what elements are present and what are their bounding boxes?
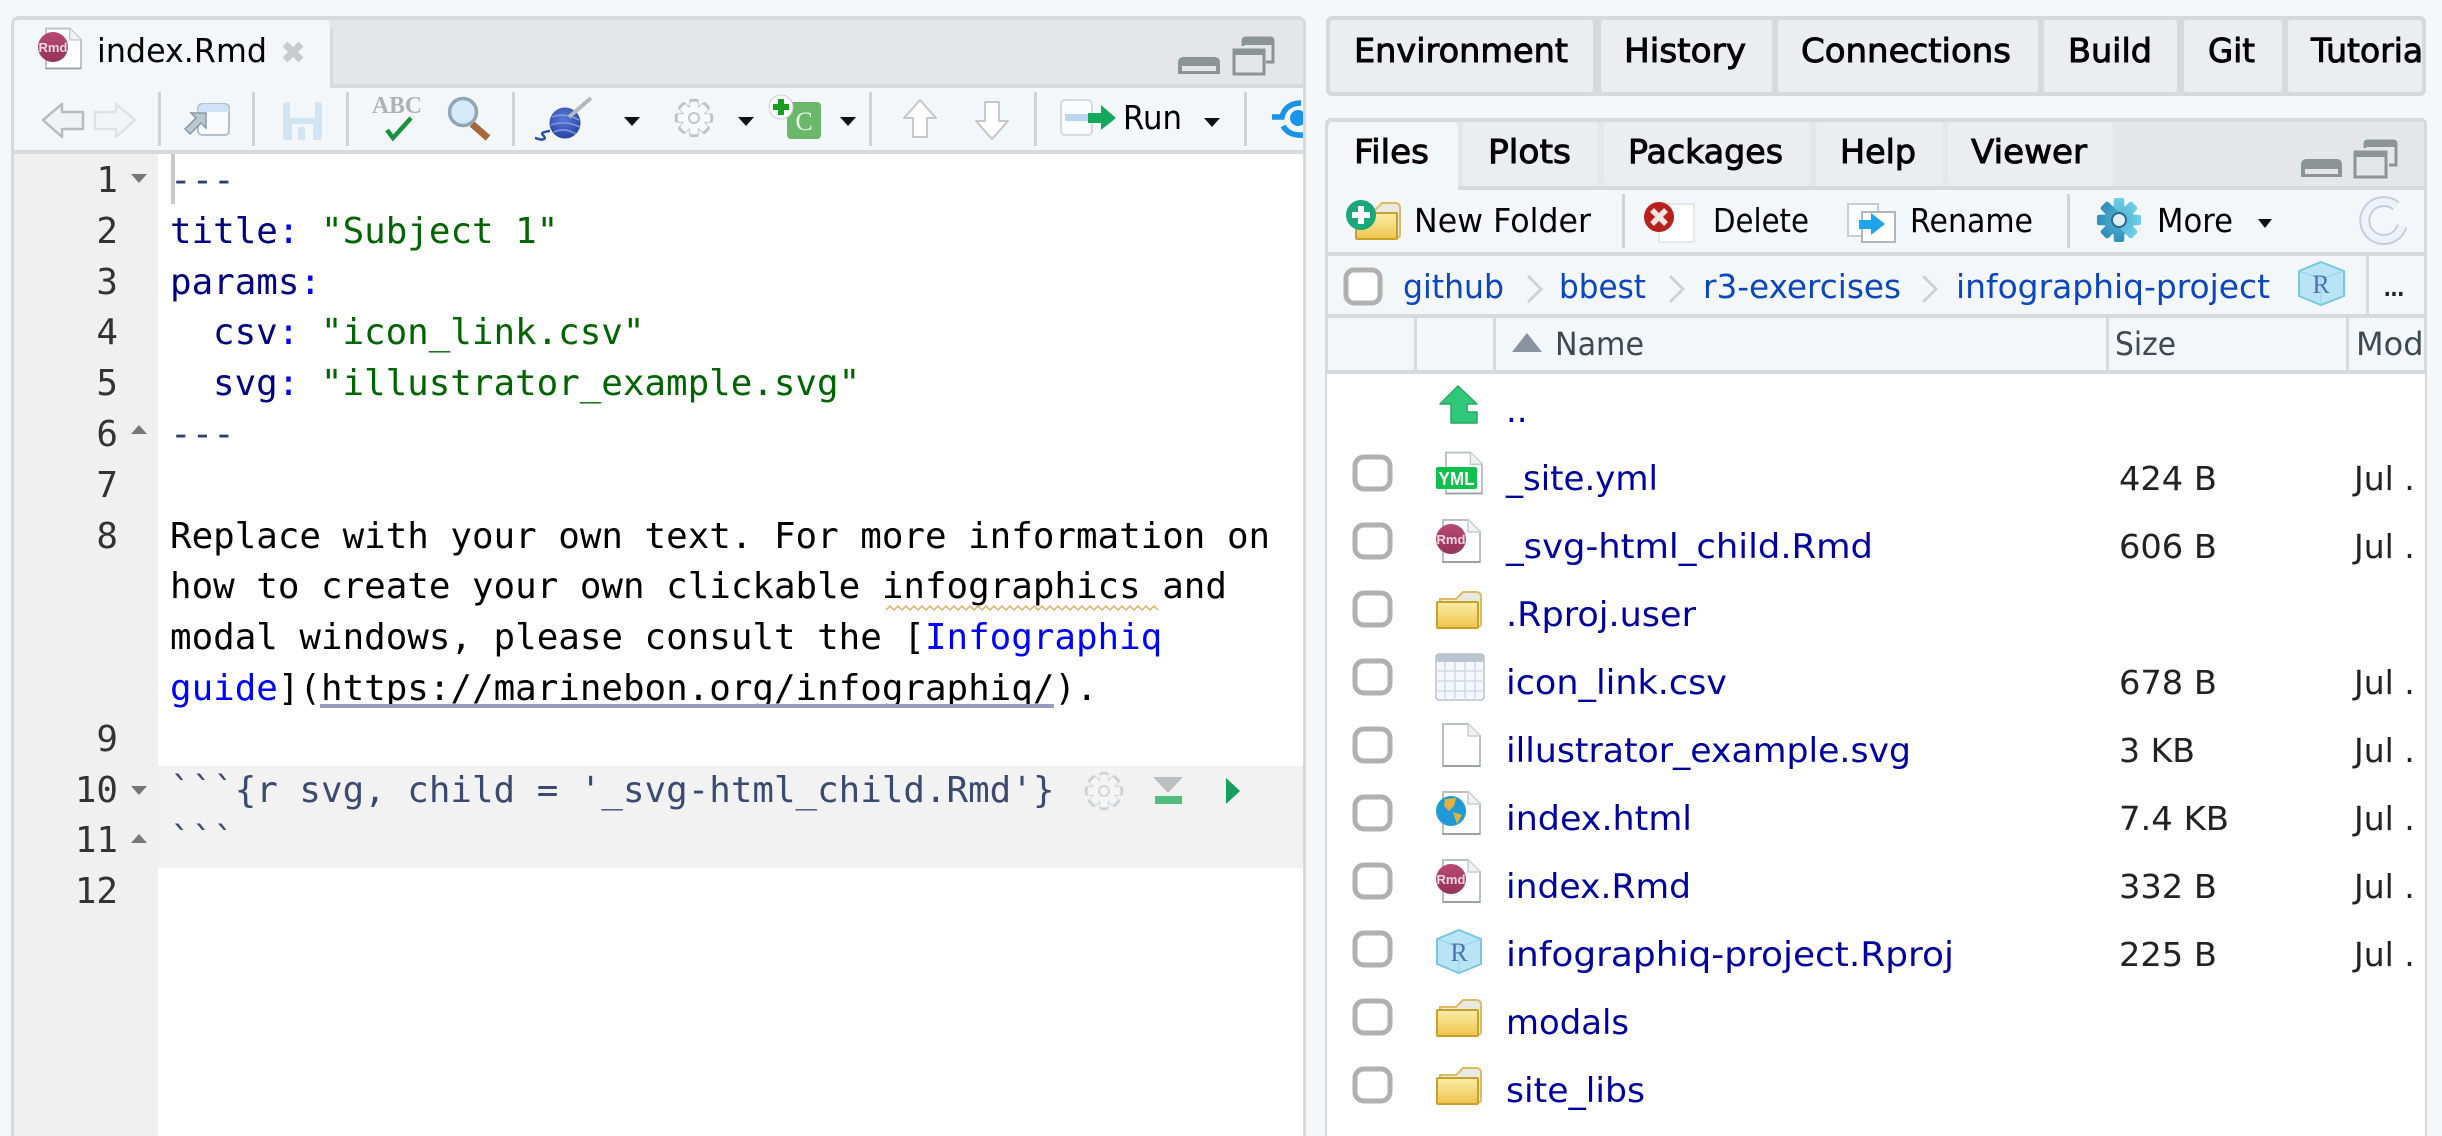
tab: Environment (1330, 20, 1593, 92)
code chunk: ```{r svg, child = '_svg-html_child.Rmd'} (170, 770, 1054, 811)
row: .Rproj.user: .Rproj.user (1506, 595, 1696, 635)
column: Name: Name (1555, 325, 1644, 363)
icon: close tab (285, 44, 301, 60)
tab: History (1601, 20, 1772, 92)
body paragraph: Replace with your own text. For more information on (170, 516, 1270, 557)
row: site_libs: site_libs (1506, 1071, 1645, 1111)
editor toolbar (43, 92, 1306, 146)
icon: Rmd file: Rmd (1437, 532, 1466, 547)
more path items: ... (2382, 265, 2406, 304)
icon: blank file (1443, 724, 1480, 766)
dropdown: knit (624, 117, 640, 126)
line number gutter: 12 (75, 871, 118, 912)
icon: Rmd file: Rmd (1437, 872, 1466, 887)
path checkbox (1346, 270, 1380, 303)
row: _site.yml: Jul . (2352, 459, 2415, 498)
icon: delete (1644, 202, 1694, 242)
line number gutter: 3 (96, 262, 118, 303)
row: index.html: Jul . (2352, 799, 2415, 838)
tab: Connections (1778, 20, 2038, 92)
tab: Files (1328, 122, 1458, 190)
parent link: .. (1506, 391, 1528, 431)
dropdown: settings (738, 117, 754, 126)
row: index.Rmd (1355, 860, 2415, 907)
body paragraph: modal windows, please consult the [Infographiq (170, 617, 1162, 658)
icon: spell check (372, 93, 422, 138)
row: _svg-html_child.Rmd: Jul . (2352, 527, 2415, 566)
link underline (320, 704, 1054, 708)
panel: source editor (11, 16, 1306, 1136)
tab: Viewer (1948, 122, 2113, 186)
icon: Rmd file (1436, 520, 1480, 562)
row: _svg-html_child.Rmd (1355, 520, 2415, 567)
row: index.Rmd: 332 B (2119, 867, 2217, 906)
text cursor (171, 154, 175, 204)
row: parent directory (1440, 386, 1528, 431)
breadcrumb: github: github (1403, 267, 1504, 306)
icon: YML file (1436, 453, 1482, 493)
button label: New Folder: New Folder (1414, 201, 1591, 240)
tab: Packages (1604, 122, 1810, 186)
tab: History: History (1624, 31, 1746, 70)
icon: show in new window (185, 104, 229, 135)
icon: Rmd document: Rmd (39, 40, 68, 55)
row: illustrator_example.svg: 3 KB (2119, 731, 2195, 770)
YAML front matter: csv: "icon_link.csv" (213, 312, 644, 353)
row: modals (1355, 1000, 1629, 1043)
icon: folder (1437, 1068, 1481, 1104)
row: icon_link.csv: Jul . (2352, 663, 2415, 702)
row: _site.yml (1355, 453, 2415, 499)
button label: More: More (2157, 201, 2233, 240)
icon: insert chunk: C (795, 107, 813, 136)
row: illustrator_example.svg: Jul . (2352, 731, 2415, 770)
line number gutter: 11 (75, 820, 118, 861)
dropdown: run (1204, 118, 1220, 127)
editor tab: index.Rmd (14, 20, 333, 88)
line number gutter: 1 (96, 160, 118, 201)
code chunk background (158, 766, 1303, 868)
icon: find (450, 98, 488, 138)
tab: Connections: Connections (1801, 31, 2011, 70)
icon: YML file: YML (1438, 469, 1474, 489)
tab: Build: Build (2068, 31, 2152, 70)
row: icon_link.csv: icon_link.csv (1506, 663, 1727, 703)
row: infographiq-project.Rproj: infographiq-project.Rproj (1506, 935, 1954, 975)
icon: folder (1437, 592, 1481, 628)
line number gutter: 8 (96, 516, 118, 557)
icon: chunk settings (1085, 772, 1123, 810)
YAML front matter: svg: "illustrator_example.svg" (213, 363, 860, 404)
panel: environment tabs (1326, 16, 2432, 96)
tab: Plots (1463, 122, 1598, 186)
breadcrumb: infographiq-project: infographiq-project (1956, 267, 2270, 306)
tab: Tutorial (clipped): Tutorial (2310, 31, 2432, 70)
tab: Tutorial (clipped) (2288, 20, 2432, 92)
tab: Plots: Plots (1488, 132, 1571, 171)
button label: Rename: Rename (1910, 201, 2033, 240)
icon: run lines (1061, 100, 1116, 135)
row: illustrator_example.svg (1355, 724, 2415, 771)
dropdown: insert chunk (840, 117, 856, 126)
icon: new folder (1346, 200, 1400, 239)
icon: R project cube: R (1450, 938, 1468, 967)
icon: maximize files pane (2355, 140, 2396, 177)
row: illustrator_example.svg: illustrator_example.svg (1506, 731, 1911, 771)
icon: run previous chunks (1153, 777, 1183, 804)
row: infographiq-project.Rproj: Jul . (2352, 935, 2415, 974)
icon: rename (1848, 204, 1895, 242)
line number gutter: 7 (96, 465, 118, 506)
line number gutter: 4 (96, 312, 118, 353)
tab: Help (1816, 122, 1943, 186)
row: index.Rmd: index.Rmd (1506, 867, 1691, 907)
tab: Environment: Environment (1354, 31, 1568, 70)
line number gutter: 6 (96, 414, 118, 455)
line number gutter: 9 (96, 719, 118, 760)
row: index.Rmd: Jul . (2352, 867, 2415, 906)
chevron (1923, 276, 1936, 302)
YAML front matter: --- (170, 160, 235, 201)
code chunk (170, 770, 1240, 861)
tab title: index.Rmd (97, 31, 267, 70)
icon: Rmd document (38, 29, 81, 68)
line number gutter: 2 (96, 211, 118, 252)
icon: back arrow (43, 104, 83, 137)
button label: Delete: Delete (1713, 201, 1809, 240)
icon: up arrow (1440, 386, 1477, 423)
icon: more gear (2097, 198, 2141, 242)
breadcrumb path bar (1328, 256, 2424, 314)
icon: minimize files pane (2301, 159, 2342, 177)
icon: previous chunk up arrow (904, 100, 936, 137)
row: modals: modals (1506, 1003, 1629, 1043)
column: Size: Size (2115, 325, 2176, 363)
row: _svg-html_child.Rmd: _svg-html_child.Rmd (1505, 527, 1873, 567)
chevron (1528, 276, 1541, 302)
YAML front matter (170, 160, 860, 455)
chevron (1670, 276, 1683, 302)
run button label: Run (1123, 98, 1182, 137)
tab: Files: Files (1354, 132, 1429, 171)
icon: run chunk (1226, 778, 1240, 804)
icon: table file (1436, 654, 1484, 700)
YAML front matter: --- (170, 414, 235, 455)
tab: Viewer: Viewer (1971, 132, 2087, 171)
files toolbar (1328, 190, 2424, 252)
row: index.html: 7.4 KB (2119, 799, 2229, 838)
breadcrumb: bbest: bbest (1559, 267, 1646, 306)
icon: next chunk down arrow (976, 102, 1008, 139)
row: icon_link.csv: 678 B (2119, 663, 2217, 702)
icon: R project cube (2299, 262, 2344, 305)
icon: Rmd file (1436, 860, 1480, 902)
icon: rerun (clipped) (1272, 103, 1306, 135)
row: infographiq-project.Rproj: 225 B (2119, 935, 2217, 974)
row: index.html: index.html (1506, 799, 1692, 839)
panel: files (1325, 118, 2442, 1136)
row: icon_link.csv (1355, 654, 2415, 703)
icon: HTML globe file (1436, 792, 1480, 834)
file list (1327, 374, 2425, 1136)
line number gutter: 5 (96, 363, 118, 404)
tab: Packages: Packages (1628, 132, 1783, 171)
line number gutter (14, 154, 158, 1136)
row: _site.yml: _site.yml (1505, 459, 1658, 499)
sort indicator (1512, 333, 1542, 352)
tab: Git: Git (2208, 31, 2255, 70)
icon: minimize pane (1178, 57, 1220, 74)
dropdown: more (2258, 219, 2272, 228)
YAML front matter: title: "Subject 1" (170, 211, 558, 252)
spell-check squiggle (886, 606, 1158, 610)
icon: folder (1437, 1000, 1481, 1036)
row: site_libs (1355, 1068, 1645, 1111)
row: index.html (1355, 792, 2415, 839)
icon: forward arrow (95, 104, 135, 137)
icon: insert chunk (769, 95, 821, 139)
body paragraph: how to create your own clickable infographics and (170, 566, 1227, 607)
icon: spell check: ABC (372, 93, 422, 119)
icon: save (283, 102, 322, 140)
icon: R project cube (1437, 930, 1481, 973)
body paragraph: guide](https://marinebon.org/infographiq/). (170, 668, 1098, 709)
icon: maximize pane (1234, 38, 1273, 74)
breadcrumb: r3-exercises: r3-exercises (1703, 267, 1901, 306)
row: infographiq-project.Rproj (1355, 930, 2415, 975)
icon: R project cube: R (2312, 270, 2330, 299)
tab: Git (2184, 20, 2282, 92)
tab: Help: Help (1840, 132, 1916, 171)
row: _svg-html_child.Rmd: 606 B (2119, 527, 2217, 566)
body paragraph (170, 516, 1270, 709)
icon: knit yarn ball (535, 98, 591, 140)
tab: Build (2044, 20, 2177, 92)
row: _site.yml: 424 B (2119, 459, 2217, 498)
icon: refresh (2365, 202, 2402, 240)
code chunk: ``` (170, 820, 235, 861)
file list header (1328, 318, 2442, 370)
line number gutter: 10 (75, 770, 118, 811)
YAML front matter: params: (170, 262, 321, 303)
row: .Rproj.user (1355, 592, 1696, 635)
icon: settings gear (675, 99, 713, 137)
fold markers (131, 174, 147, 843)
